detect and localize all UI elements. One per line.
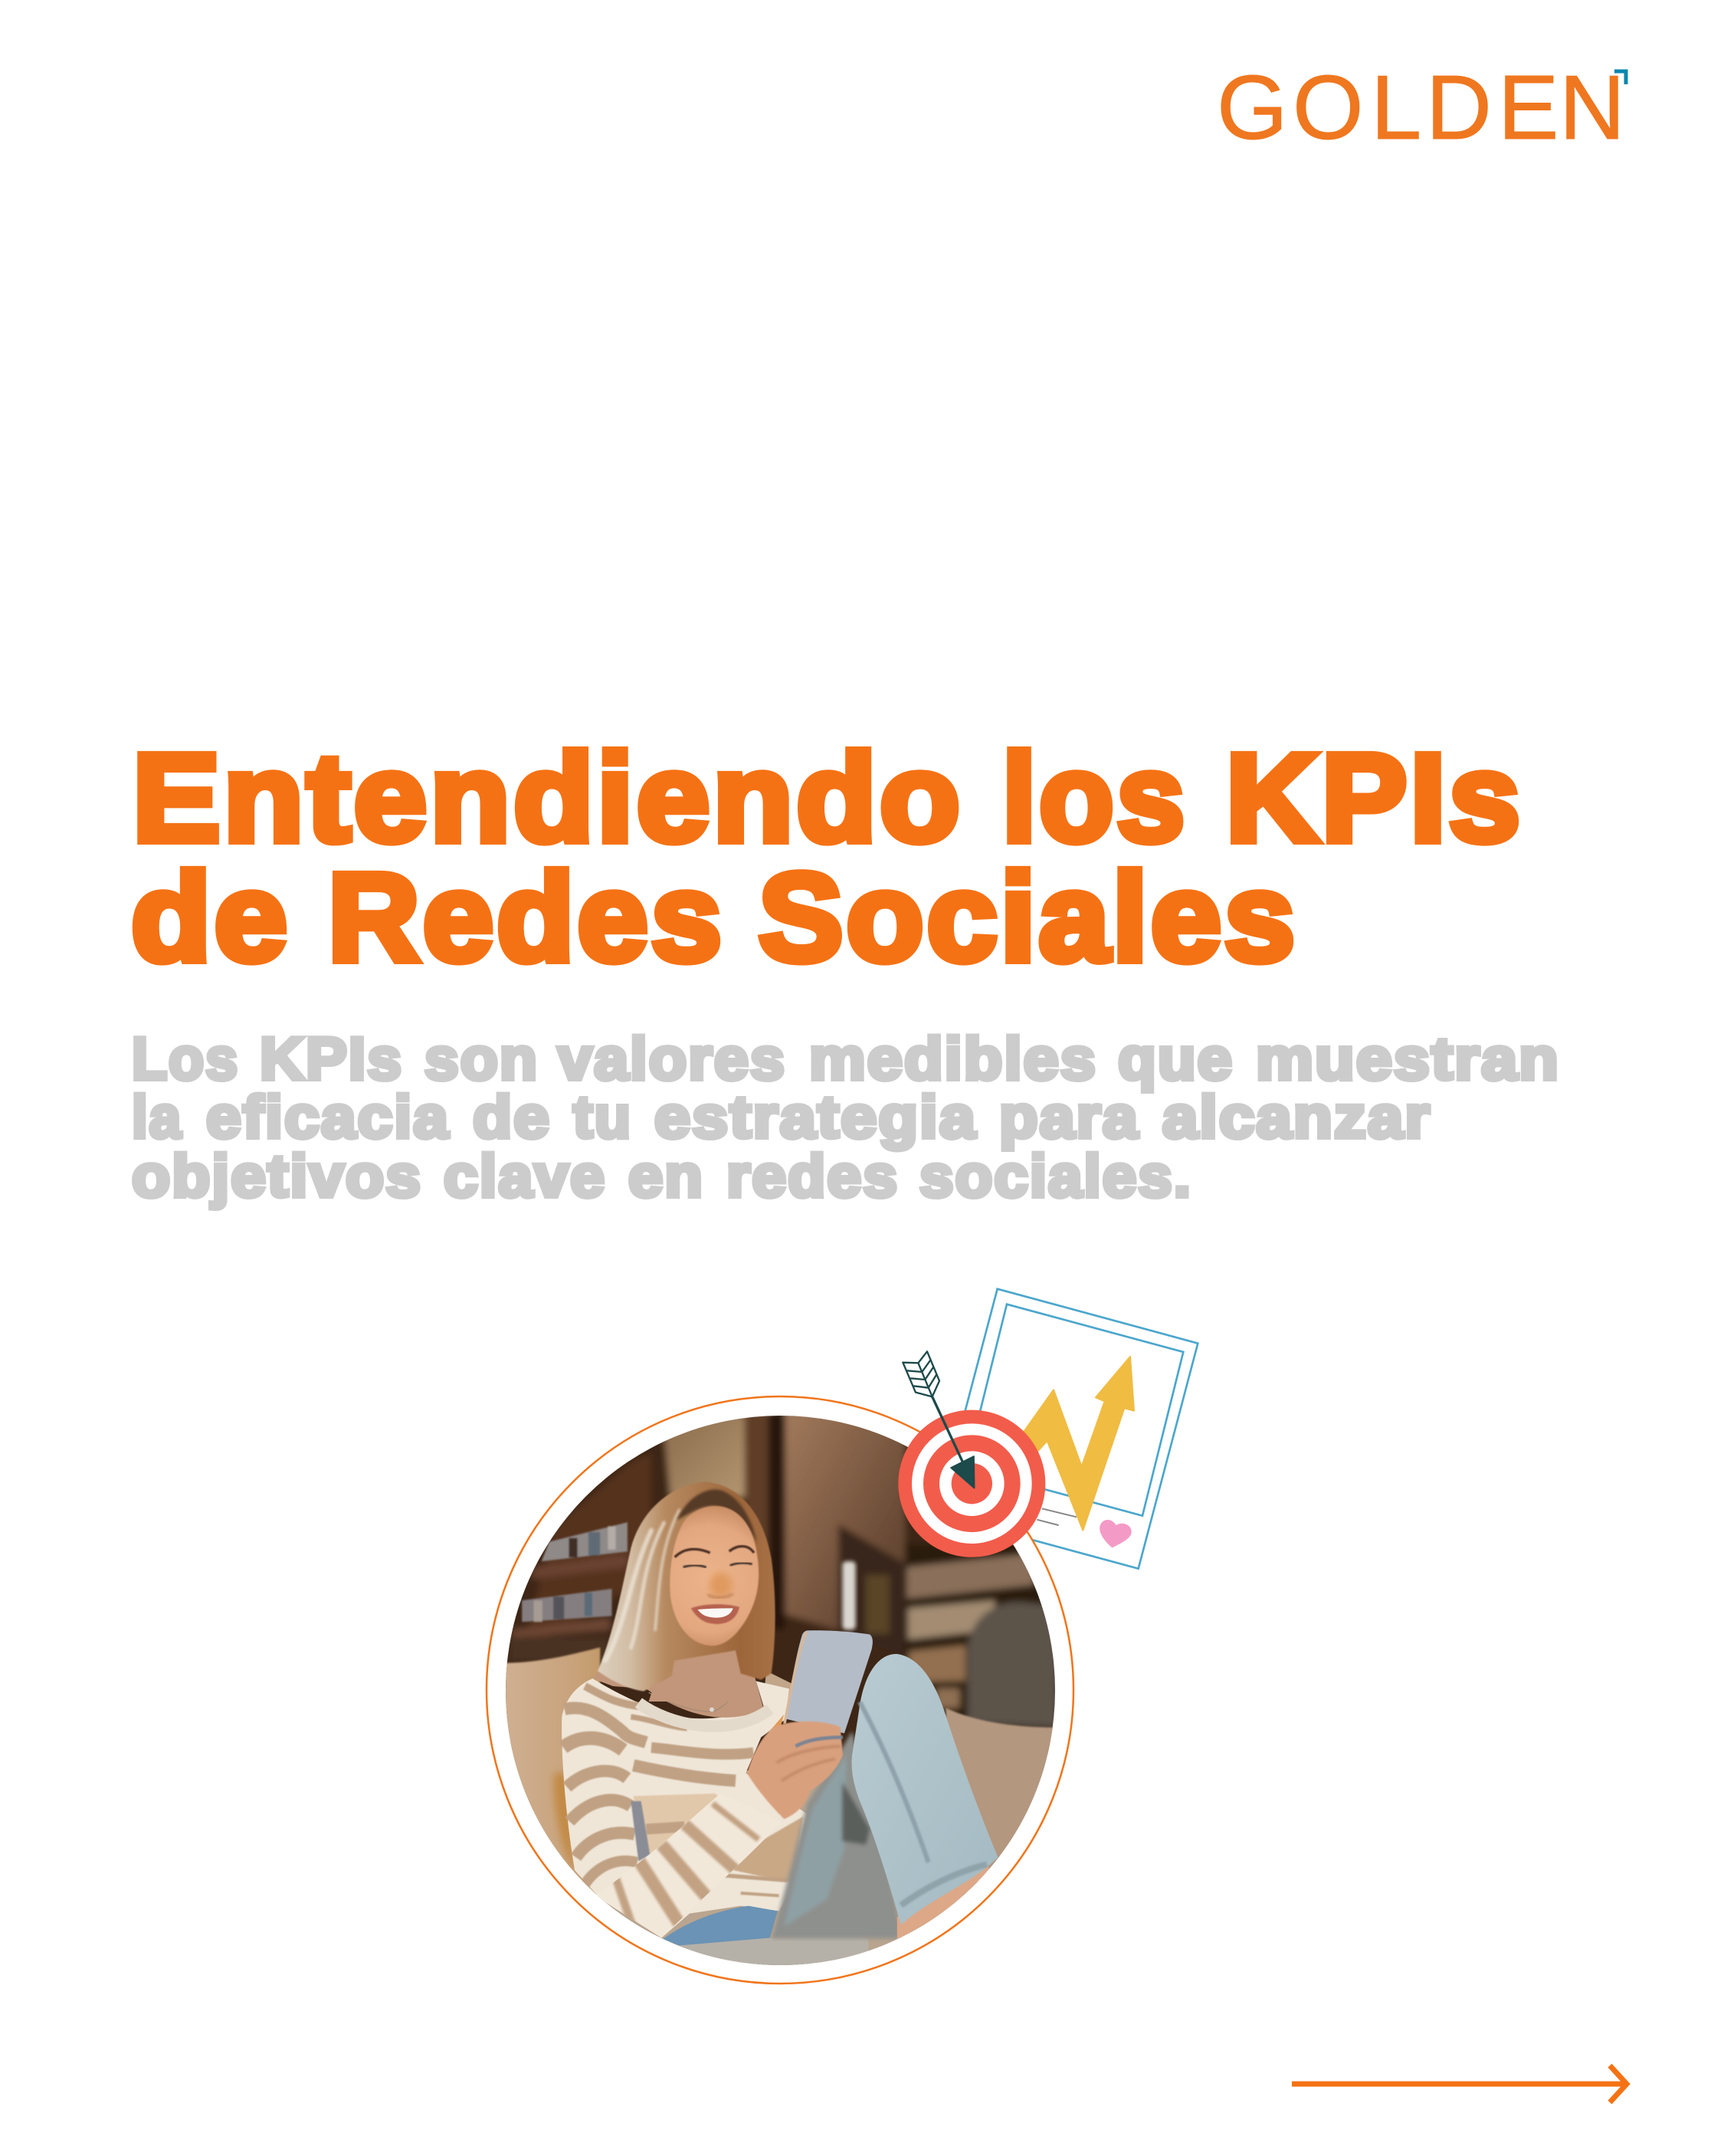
sofa shadow [554,1773,575,1872]
torso [554,1656,868,1977]
arrow head [951,1456,975,1488]
sweater shadow [631,1801,650,1861]
subtitle text: KPIs [260,1025,403,1092]
subtitle text: sociales. [919,1142,1192,1209]
sweater body [562,1679,807,1938]
white book strip [842,1561,856,1629]
sweater midriff [633,1793,718,1854]
finger lines [776,1746,841,1780]
sweater stripes [563,1686,787,1895]
title: Redes [328,847,725,987]
neck [649,1630,741,1702]
eyebrows [675,1549,710,1557]
jeans waist [663,1906,778,1945]
sleeve forearm [597,1795,766,1938]
subtitle text: objetivos [132,1142,422,1209]
room background [499,1411,1065,1974]
sweater lower right [733,1816,803,1883]
necklace pendant [710,1708,714,1712]
chest skin [593,1670,763,1718]
subtitle text: estrategia [654,1083,977,1150]
icon: heart [1100,1520,1132,1547]
subtitle text: medibles [809,1025,1097,1092]
icon: growth arrow [1019,1357,1134,1547]
foot [897,1856,998,1966]
head [598,1482,775,1702]
room and sofa [499,1411,1065,1977]
jeans seam [860,1702,929,1862]
necklace [649,1681,739,1711]
sofa cushion bottom [677,1938,869,1965]
polaroid chart card [938,1289,1198,1569]
subtitle text: la [132,1083,182,1150]
subtitle text: muestran [1256,1025,1560,1092]
lips [691,1604,739,1624]
subtitle text: que [1118,1025,1234,1092]
sofa right [945,1708,1053,1899]
title: Sociales [759,847,1298,987]
subtitle text: redes [726,1142,899,1209]
orange ring around photo [487,1396,1073,1984]
sofa arm behind sweater [765,1673,791,1702]
sofa left [506,1646,601,1898]
eyes [683,1565,706,1567]
teeth [698,1608,733,1618]
jeans knee [851,1654,998,1925]
arrow fletching [903,1351,939,1396]
subtitle text: Los [132,1025,239,1092]
subtitle text: de [473,1083,551,1150]
subtitle text: clave [444,1142,606,1209]
title: de [131,847,290,987]
polaroid caption lines [1037,1508,1077,1525]
logo: GOLDEN: GOLDEN [1217,57,1625,159]
title [131,727,1523,987]
subtitle text [132,1025,1560,1209]
nose highlight [710,1573,733,1598]
subtitle text: para [999,1083,1139,1150]
subtitle text: tu [573,1083,632,1150]
hair crown shadow [677,1489,757,1543]
logo corner accent [1614,71,1626,84]
base under figure [518,1770,1044,1965]
hair strands [605,1510,680,1661]
title: los [1002,727,1188,868]
icon: target with arrow [898,1351,1045,1557]
arrow shaft [932,1396,966,1469]
hair [598,1482,775,1692]
subtitle text: alcanzar [1162,1083,1431,1150]
subtitle text: son [424,1025,539,1092]
sleeve stripes [613,1803,759,1929]
lower leg [772,1731,903,1938]
hand [747,1715,843,1819]
title: Entendiendo [133,727,963,868]
title: KPIs [1226,727,1523,868]
phone [785,1630,873,1734]
collar [638,1703,770,1726]
photo: woman smiling at her phone on a sofa [499,1411,1065,1977]
subtitle text: eficacia [206,1083,450,1150]
arrow: next page [1292,2066,1627,2102]
subtitle text: valores [558,1025,786,1092]
face [670,1506,759,1646]
subtitle text: en [628,1142,704,1209]
phone shadow on fingers [795,1738,843,1746]
books left [522,1522,628,1622]
legs [772,1654,998,1966]
nose shadow [707,1593,733,1598]
